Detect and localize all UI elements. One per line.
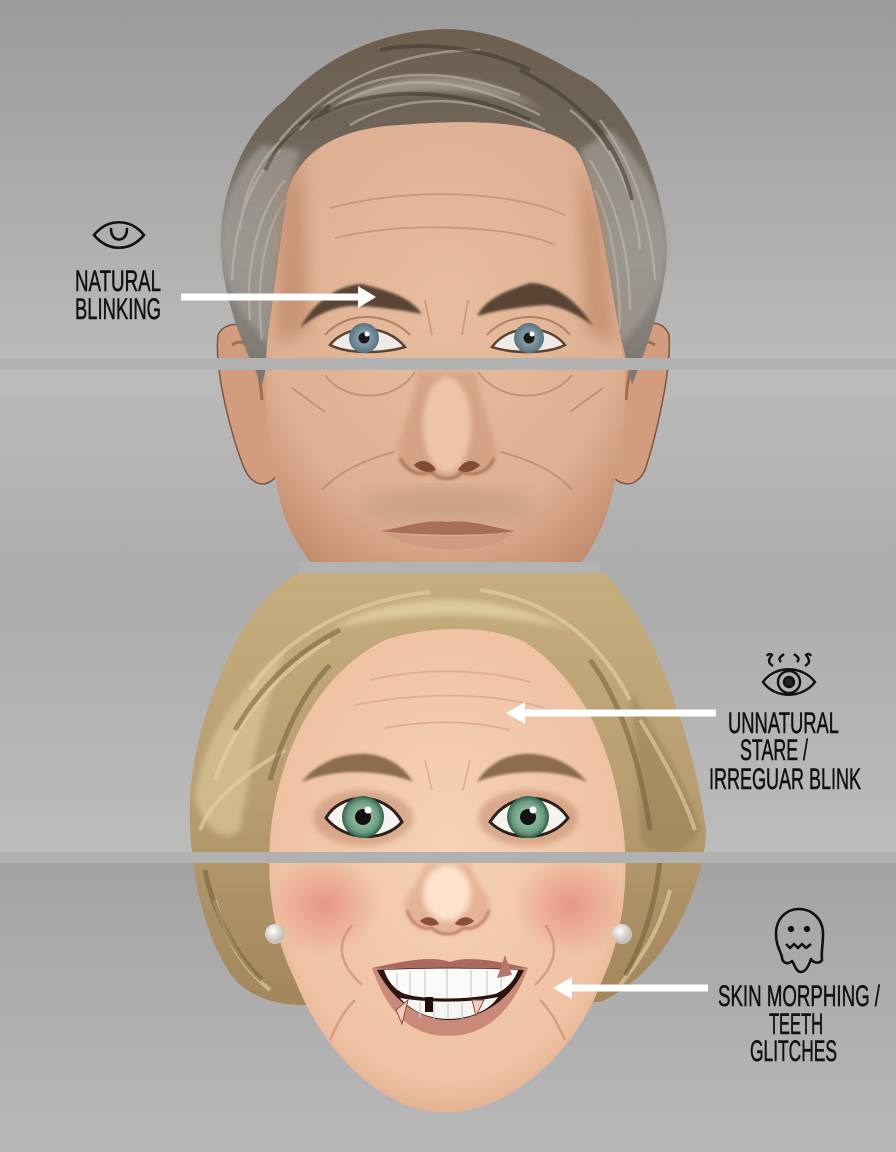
man under-eye bags — [292, 372, 603, 412]
woman hair — [190, 573, 706, 1005]
man hair — [221, 29, 667, 385]
label: skin morphing: TEETH — [769, 1008, 823, 1041]
woman smile folds — [330, 925, 565, 1040]
woman nose — [405, 863, 490, 934]
callout: skin morphing — [718, 909, 880, 1068]
label: skin morphing: GLITCHES — [750, 1035, 837, 1068]
label: natural blinking: BLINKING — [75, 293, 161, 326]
woman portrait — [190, 573, 706, 1112]
woman eyes — [313, 790, 578, 846]
arrow: to man's brow — [181, 286, 376, 308]
man forehead wrinkles — [330, 194, 565, 335]
label: natural blinking: NATURAL — [75, 265, 161, 298]
man nose — [398, 372, 496, 480]
label: unnatural stare: STARE / — [740, 734, 808, 767]
man ears — [217, 323, 669, 484]
icon: melting ghost — [776, 909, 823, 972]
man band — [0, 358, 896, 370]
callout: natural blinking — [75, 222, 161, 326]
label: natural blinking — [75, 265, 161, 326]
label: skin morphing — [718, 980, 880, 1068]
arrow: to woman's forehead — [506, 702, 716, 724]
woman forehead wrinkles — [355, 671, 545, 790]
man temple shading — [275, 160, 615, 345]
callout: unnatural stare — [709, 654, 861, 796]
man stubble and mouth — [322, 452, 572, 550]
woman eyebrows — [302, 754, 587, 782]
icon: staring eye — [763, 654, 815, 695]
man eyebrows — [300, 283, 593, 328]
icon: calm eye — [94, 222, 144, 248]
label: unnatural stare — [709, 707, 861, 796]
man face — [266, 122, 625, 562]
woman cheek blush — [278, 864, 618, 946]
woman band — [0, 852, 896, 863]
arrow: to woman's cheek — [553, 977, 708, 999]
woman mouth with glitched teeth — [372, 955, 528, 1036]
man eyes — [325, 317, 570, 353]
woman face — [269, 629, 626, 1112]
chin divider — [298, 562, 600, 573]
woman earrings — [265, 924, 632, 944]
man portrait — [217, 29, 669, 562]
